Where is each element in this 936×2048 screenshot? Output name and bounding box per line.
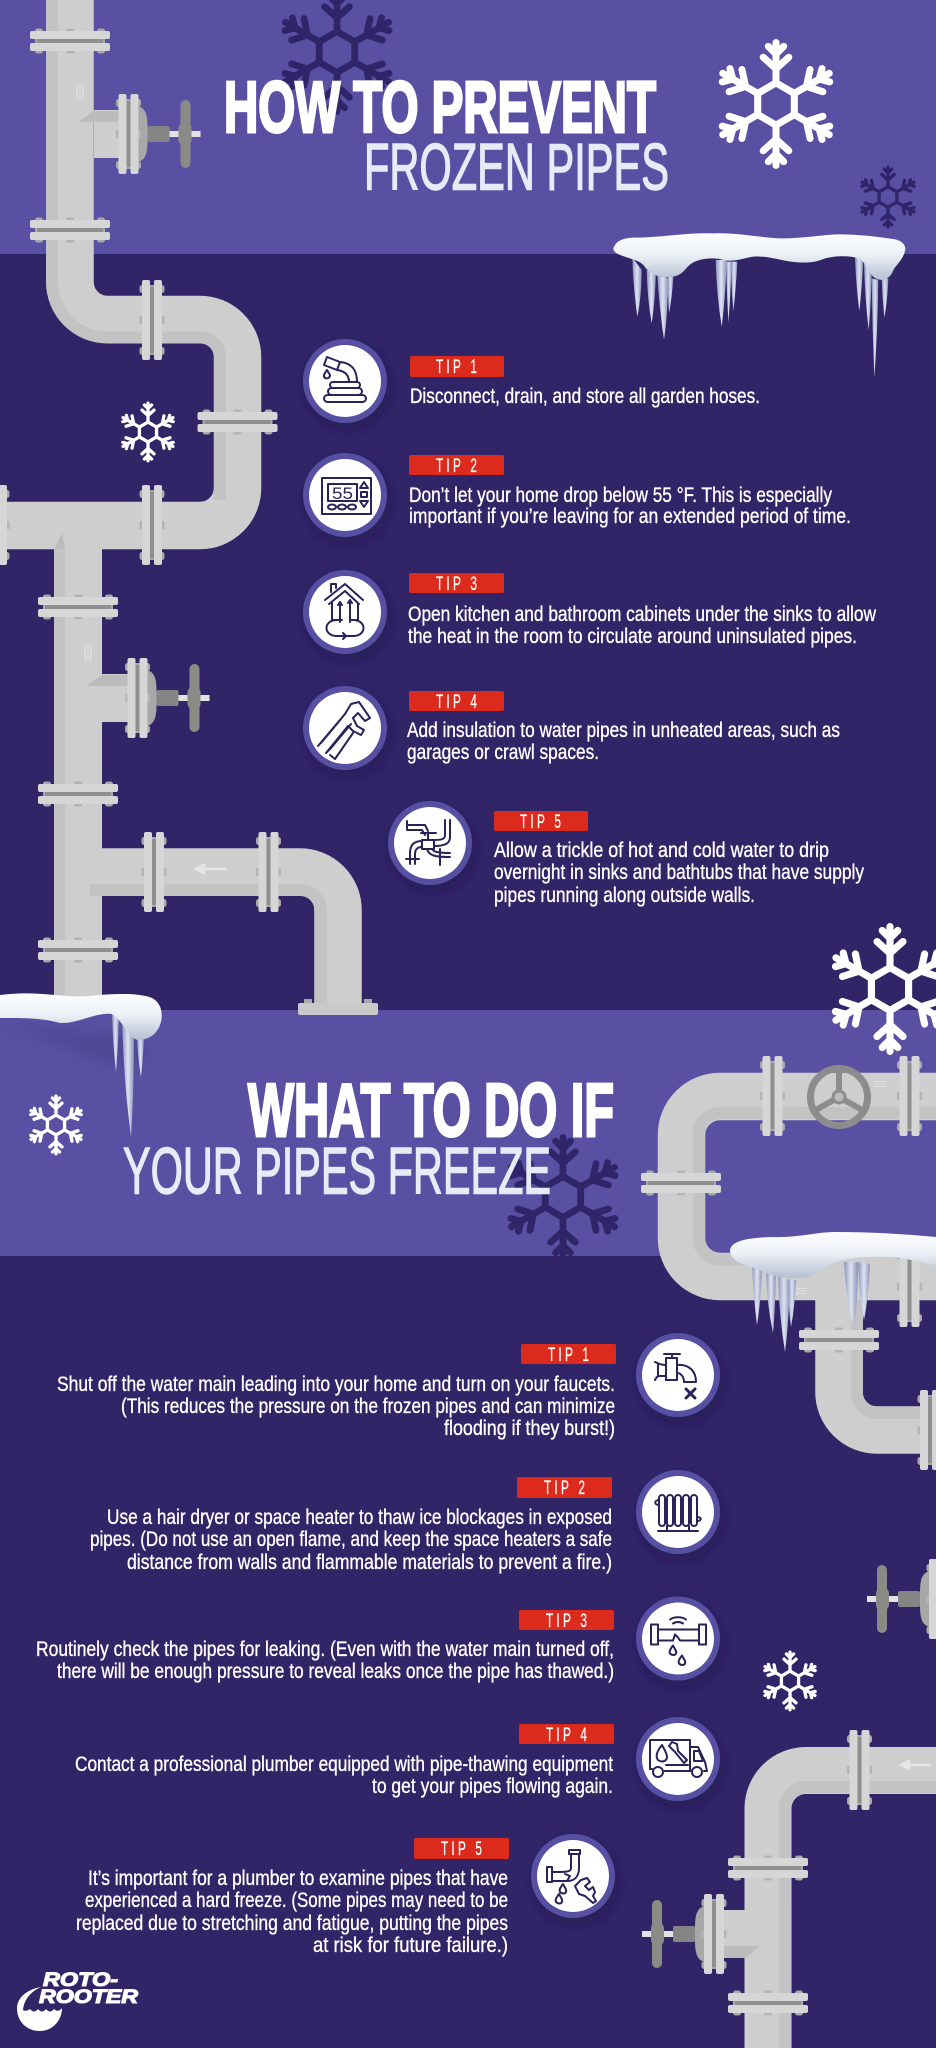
snowflake: small white left xyxy=(120,403,176,461)
freeze tip 4 xyxy=(75,1717,720,1801)
text: tip 5: experienced a hard freeze. (Some pipes may need to be xyxy=(85,1888,508,1912)
badge: tip 5 xyxy=(414,1838,509,1860)
badge: tip 4: TIP 4 xyxy=(546,1725,587,1746)
text: tip 1: Disconnect, drain, and store all garden hoses. xyxy=(410,384,760,408)
pipe system: right edge valve xyxy=(867,1559,936,1639)
badge: tip 1 xyxy=(410,356,504,378)
badge: tip 4: TIP 4 xyxy=(436,692,477,713)
text: tip 5: replaced due to stretching and fatigue, putting the pipes xyxy=(76,1911,508,1935)
title: what to do if: WHAT TO DO IF xyxy=(248,1068,614,1152)
text: tip 5 xyxy=(76,1866,508,1957)
logo: Roto-Rooter xyxy=(17,1970,138,2031)
pipe system: upper left xyxy=(0,0,278,565)
text: tip 5: at risk for future failure.) xyxy=(313,1933,508,1957)
icon: faucet shut off xyxy=(636,1333,720,1417)
title: frozen pipes: FROZEN PIPES xyxy=(364,130,669,204)
text: tip 2 xyxy=(90,1505,612,1574)
snow cap with icicles: left of second band xyxy=(0,993,162,1137)
logo: Roto-Rooter: ROOTER xyxy=(39,1987,138,2008)
text: tip 3 xyxy=(36,1637,614,1683)
panel: second header band xyxy=(0,1010,936,1256)
badge: tip 4 xyxy=(519,1724,614,1746)
text: tip 1: flooding if they burst!) xyxy=(444,1416,615,1440)
snowflake: dark top xyxy=(279,0,395,112)
snowflake: dark second band xyxy=(505,1137,621,1257)
badge: tip 2 xyxy=(517,1477,612,1499)
title: your pipes freeze: YOUR PIPES FREEZE xyxy=(123,1134,551,1208)
badge: tip 2 xyxy=(409,455,504,477)
badge: tip 3: TIP 3 xyxy=(436,574,477,595)
pipe system: upper right xyxy=(641,1056,936,1470)
title: how to prevent: HOW TO PREVENT xyxy=(224,68,656,148)
panel: top header band xyxy=(0,0,936,254)
text: tip 2 xyxy=(409,483,851,528)
text: tip 4: Contact a professional plumber equipped with pipe-thawing equipment xyxy=(75,1752,613,1776)
icon: house with circulating heat xyxy=(303,570,387,654)
badge: tip 5 xyxy=(494,811,588,833)
badge: tip 1: TIP 1 xyxy=(548,1345,589,1366)
text: tip 3 xyxy=(408,602,876,648)
snowflake: white top right xyxy=(716,43,836,165)
text: tip 3: there will be enough pressure to reveal leaks once the pipe has thawed.) xyxy=(57,1659,614,1683)
text: tip 4 xyxy=(407,718,840,764)
text: tip 5 xyxy=(494,838,864,907)
snow cap with icicles: top right xyxy=(613,233,905,378)
snowflake: small white lower right xyxy=(762,1652,818,1710)
text: tip 5: Allow a trickle of hot and cold water to drip xyxy=(494,838,829,862)
badge: tip 5: TIP 5 xyxy=(520,812,561,833)
text: tip 4: garages or crawl spaces. xyxy=(407,740,599,764)
icon: pipe wrench xyxy=(303,686,387,770)
icon: broken pipe and wrench xyxy=(531,1834,615,1918)
snowflake: big white right edge xyxy=(829,927,936,1051)
freeze tip 5 xyxy=(76,1834,615,1957)
badge: tip 3: TIP 3 xyxy=(546,1611,587,1632)
badge: tip 5: TIP 5 xyxy=(441,1839,482,1860)
text: tip 4 xyxy=(75,1752,613,1798)
snowflake: small white second band xyxy=(28,1096,84,1154)
icon: garden hose xyxy=(303,339,387,423)
freeze tip 2 xyxy=(90,1470,720,1574)
prevent tip 2 xyxy=(303,453,851,537)
text: tip 2: pipes. (Do not use an open flame, and keep the space heaters a safe xyxy=(90,1527,612,1551)
badge: tip 3 xyxy=(409,573,504,595)
text: tip 1: (This reduces the pressure on the frozen pipes and can minimize xyxy=(121,1394,615,1418)
badge: tip 1 xyxy=(521,1344,616,1366)
freeze tip 3 xyxy=(36,1596,720,1683)
snow cap with icicles: right of second band xyxy=(730,1232,936,1352)
icon: leaking pipe xyxy=(636,1596,720,1680)
pipe foot flange xyxy=(298,999,378,1015)
icon: plumber truck xyxy=(636,1717,720,1801)
text: tip 5: It’s important for a plumber to examine pipes that have xyxy=(88,1866,508,1890)
icon: plumbing valve pipes xyxy=(388,801,472,885)
text: tip 2: Use a hair dryer or space heater to thaw ice blockages in exposed xyxy=(107,1505,612,1529)
text: tip 5: pipes running along outside walls. xyxy=(494,883,755,907)
text: tip 1: Shut off the water main leading into your home and turn on your faucets. xyxy=(57,1372,615,1396)
badge: tip 2: TIP 2 xyxy=(436,456,477,477)
prevent tip 4 xyxy=(303,686,840,770)
badge: tip 1: TIP 1 xyxy=(436,357,477,378)
text: tip 3: Routinely check the pipes for leaking. (Even with the water main turned off, xyxy=(36,1637,614,1661)
badge: tip 2: TIP 2 xyxy=(544,1478,585,1499)
pipe system: lower left xyxy=(38,533,378,1015)
badge: tip 4 xyxy=(409,691,504,713)
text: tip 4: to get your pipes flowing again. xyxy=(372,1774,613,1798)
text: tip 2: important if you’re leaving for an extended period of time. xyxy=(409,504,851,528)
text: tip 2: distance from walls and flammable materials to prevent a fire.) xyxy=(127,1550,612,1574)
freeze tip 1 xyxy=(57,1333,720,1440)
icon: radiator xyxy=(636,1470,720,1554)
badge: tip 3 xyxy=(519,1610,614,1632)
text: tip 4: Add insulation to water pipes in unheated areas, such as xyxy=(407,718,840,742)
icon: thermostat xyxy=(303,453,387,537)
prevent tip 1 xyxy=(303,339,760,423)
snowflake: small dark top right xyxy=(859,167,917,227)
logo: Roto-Rooter: ROTO- xyxy=(43,1970,118,1991)
text: tip 2: Don’t let your home drop below 55 °F. This is especially xyxy=(409,483,832,507)
prevent tip 3 xyxy=(303,570,876,654)
icon: thermostat: 55 xyxy=(332,484,353,503)
pipe system: lower right xyxy=(642,1730,936,2048)
text: tip 1 xyxy=(57,1372,615,1440)
valve wheel xyxy=(810,1068,868,1126)
prevent tip 5 xyxy=(388,801,864,907)
